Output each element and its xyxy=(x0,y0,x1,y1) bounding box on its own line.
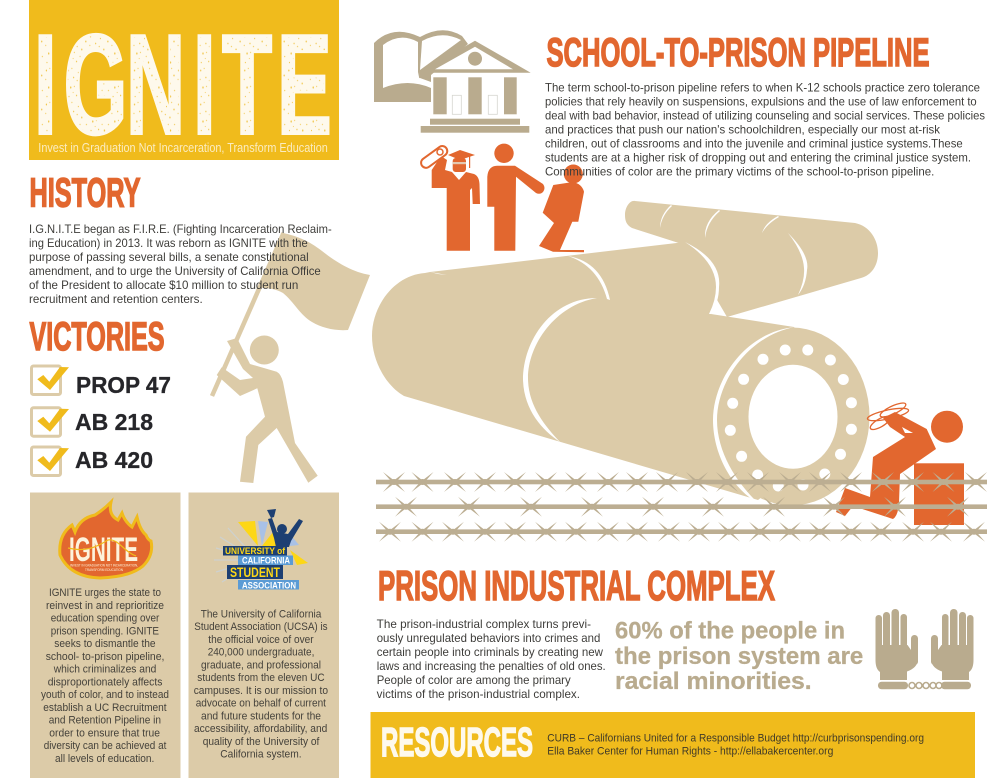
icon: checkbox 2 xyxy=(32,408,69,436)
logo: IGNITE flame: INVEST IN GRADUATION NOT INCARCERATION, xyxy=(70,564,138,568)
text block: UCSA description: students from the eleven UC xyxy=(197,672,325,684)
back pipe segment xyxy=(625,201,878,317)
text block: UCSA description: Student Association (UCSA) is xyxy=(194,621,328,633)
text block: school-to-prison pipeline: and practices that push our nation's schoolchildren, especially our most at-risk xyxy=(545,124,940,137)
text block: history: of the President to allocate $10 million to student run xyxy=(29,279,298,292)
figure: graduate with diploma xyxy=(419,144,480,251)
text block: prison-industrial complex: certain people into criminals by creating new xyxy=(377,646,604,659)
figure: child xyxy=(539,164,584,252)
text block: history: recruitment and retention centers. xyxy=(29,293,203,306)
logo: University of California Student Association: ASSOCIATION xyxy=(242,580,296,590)
main pipe segment xyxy=(372,242,860,500)
logo: University of California Student Association: UNIVERSITY of xyxy=(225,546,286,556)
icon: prisoner sitting with bound hands xyxy=(836,400,964,525)
callout: 60 percent statistic: the prison system are xyxy=(615,643,863,670)
text block: IGNITE description: diversity can be achieved at xyxy=(44,740,167,752)
icon: book and school building xyxy=(374,30,531,133)
figure: adult xyxy=(487,144,544,251)
text block: history: amendment, and to urge the University of California Office xyxy=(29,265,321,278)
text block: IGNITE description xyxy=(41,587,169,765)
panel: IGNITE banner xyxy=(29,0,339,164)
text block: school-to-prison pipeline xyxy=(545,82,985,179)
heading: History: HISTORY xyxy=(30,170,140,216)
text block: IGNITE description: school- to-prison pipeline, xyxy=(46,651,164,663)
text block: UCSA description: California system. xyxy=(220,749,302,761)
icon: handcuffed hands xyxy=(876,609,974,689)
text block: UCSA description: graduate, and professional xyxy=(201,659,321,671)
text block: IGNITE description: which criminalizes and xyxy=(53,664,156,676)
panel: IGNITE description xyxy=(30,492,180,778)
text block: prison-industrial complex: ously unregulated behaviors into crimes and xyxy=(377,632,600,645)
callout: 60 percent statistic: 60% of the people in xyxy=(615,617,845,644)
icon: person carrying a flag xyxy=(212,233,370,483)
item: Prop 47: PROP 47 xyxy=(76,372,171,398)
logo: University of California Student Association xyxy=(214,509,308,590)
text block: IGNITE description: education spending over xyxy=(51,613,160,625)
panel: resources xyxy=(370,712,975,778)
logo: University of California Student Association: CALIFORNIA xyxy=(242,556,290,566)
text block: UCSA description: accessibility, affordability, and xyxy=(194,723,327,735)
text block: IGNITE description: disproportionately affects xyxy=(48,676,163,688)
text block: resource links xyxy=(547,733,924,758)
text block: IGNITE description: and Retention Pipeline in xyxy=(49,715,161,727)
callout: 60 percent statistic: racial minorities. xyxy=(615,668,812,695)
heading: Victories: VICTORIES xyxy=(30,315,164,359)
tagline: Invest in Graduation Not Incarceration, Transform Education xyxy=(38,141,328,155)
text block: prison-industrial complex: victims of the prison-industrial complex. xyxy=(377,688,580,701)
heading: Resources: RESOURCES xyxy=(381,719,533,765)
text block: IGNITE description: all levels of education. xyxy=(55,753,154,765)
logo: IGNITE flame: TRANSFORM EDUCATION xyxy=(85,568,123,572)
text block: history: I.G.N.I.T.E began as F.I.R.E. (Fighting Incarceration Reclaim- xyxy=(29,223,332,236)
logo: University of California Student Association: STUDENT xyxy=(230,565,281,580)
text block: IGNITE description: seeks to dismantle the xyxy=(54,638,156,650)
text block: prison-industrial complex: People of color are among the primary xyxy=(377,674,571,687)
text block: prison-industrial complex: laws and increasing the penalties of old ones. xyxy=(377,660,606,673)
text block: school-to-prison pipeline: Communities of color are the primary victims of the school-to-prison pipeline. xyxy=(545,166,934,179)
callout: 60 percent statistic xyxy=(615,617,863,695)
logo: IGNITE flame: IGNITE xyxy=(69,531,138,569)
text block: IGNITE description: establish a UC Recruitment xyxy=(43,702,167,714)
text block: history: purpose of passing several bills, a senate constitutional xyxy=(29,251,309,264)
text block: prison-industrial complex: The prison-industrial complex turns previ- xyxy=(377,618,591,631)
text block: school-to-prison pipeline: policies that rely heavily on suspensions, expulsions and the use of law enforcement to xyxy=(545,96,977,109)
illustration: pipeline xyxy=(372,201,878,505)
icon: graduate, adult and child figures xyxy=(419,144,584,252)
pipe hole xyxy=(748,365,838,469)
text block: school-to-prison pipeline: children, out of classrooms and into the juvenile and criminal justice systems.These xyxy=(545,138,963,151)
text block: UCSA description: advocate on behalf of current xyxy=(196,698,327,710)
text block: IGNITE description: youth of color, and to instead xyxy=(41,689,169,701)
icon: checkbox 1 xyxy=(32,366,69,394)
text block: UCSA description: The University of California xyxy=(201,608,322,620)
text block: IGNITE description: IGNITE urges the state to xyxy=(49,587,161,599)
text block: history: ing Education) in 2013. It was reborn as IGNITE with the xyxy=(29,237,308,250)
text block: school-to-prison pipeline: students are at a higher risk of dropping out and entering the criminal justice system. xyxy=(545,152,971,165)
text block: resource links: Ella Baker Center for Human Rights - http://ellabakercenter.org xyxy=(547,746,833,758)
item: AB 218: AB 218 xyxy=(75,409,153,435)
text block: UCSA description: 240,000 undergraduate, xyxy=(208,647,314,659)
logo: IGNITE flame xyxy=(60,502,152,578)
text block: IGNITE description: order to ensure that true xyxy=(49,728,160,740)
text block: IGNITE description: reinvest in and reprioritize xyxy=(46,600,164,612)
text block: school-to-prison pipeline: deal with bad behavior, instead of utilizing counseling and social services. These policies xyxy=(545,110,985,123)
text block: UCSA description: and future students for the xyxy=(201,710,321,722)
text block: UCSA description: quality of the University of xyxy=(203,736,320,748)
panel: UCSA description xyxy=(188,492,339,778)
text block: IGNITE description: prison spending. IGNITE xyxy=(51,625,159,637)
icon: checkbox 3 xyxy=(32,447,69,476)
item: AB 420: AB 420 xyxy=(75,447,153,473)
flange xyxy=(714,328,870,506)
list: victories xyxy=(32,366,171,476)
text block: school-to-prison pipeline: The term school-to-prison pipeline refers to when K-12 schools practice zero tolerance xyxy=(545,82,980,95)
title: IGNITE: IGNITE xyxy=(34,5,332,164)
text block: resource links: CURB – Californians United for a Responsible Budget http://curbprisonspending.org xyxy=(547,733,924,745)
text block: prison-industrial complex xyxy=(377,618,606,701)
text block: history xyxy=(29,223,332,306)
text block: UCSA description xyxy=(194,608,328,761)
text block: UCSA description: campuses. It is our mission to xyxy=(194,685,328,697)
text block: UCSA description: the official voice of over xyxy=(208,634,314,646)
illustration: barbed wire xyxy=(376,472,987,542)
